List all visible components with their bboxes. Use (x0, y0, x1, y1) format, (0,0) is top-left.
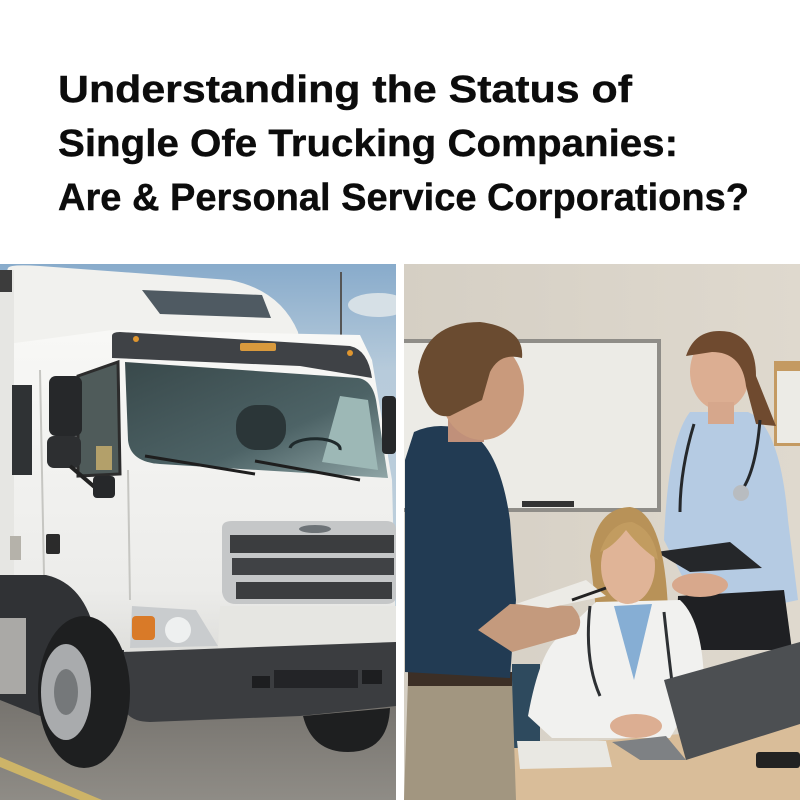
wheel arch and side step (0, 575, 124, 716)
side vent (12, 385, 32, 475)
papers in man's hand (516, 580, 606, 608)
road surface (0, 700, 396, 800)
title: Understanding the Status of (58, 69, 632, 111)
antenna (340, 272, 342, 342)
title: Single Ofe Trucking Companies: (58, 123, 678, 165)
title (58, 69, 749, 219)
desk (512, 724, 800, 800)
bumper (122, 642, 396, 722)
seated doctor (528, 507, 704, 738)
wall poster (774, 361, 800, 446)
cab body (14, 334, 396, 652)
far wheel (303, 708, 390, 752)
front wheel (38, 616, 130, 768)
door window (78, 362, 120, 476)
visor (112, 332, 372, 378)
headlight (130, 606, 218, 648)
panel: medical office photo (404, 264, 800, 800)
grille (222, 521, 396, 604)
standing woman (656, 331, 798, 650)
door details (40, 370, 130, 600)
wipers (145, 456, 360, 480)
roof fairing (7, 265, 298, 344)
desk papers (517, 741, 612, 769)
mirrors (49, 376, 82, 436)
standing man (404, 322, 580, 800)
title: Are & Personal Service Corporations? (58, 177, 749, 219)
lower front fender (395, 606, 396, 638)
laptop (664, 642, 800, 760)
windshield (125, 362, 388, 478)
panel: truck photo (0, 264, 408, 800)
whiteboard (404, 339, 661, 512)
